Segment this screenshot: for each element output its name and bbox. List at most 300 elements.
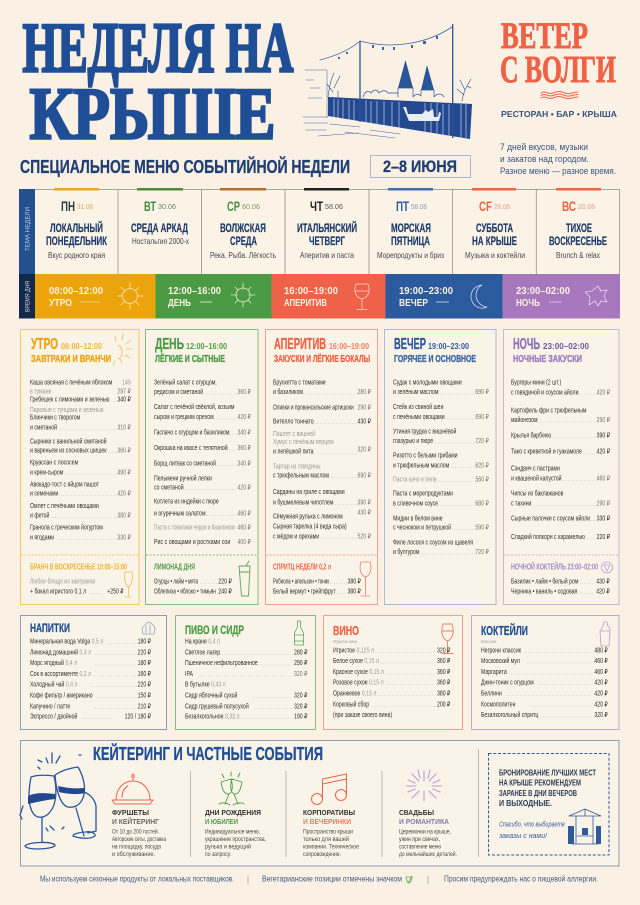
panel: wine	[324, 616, 462, 730]
day items: 420 ₽	[237, 484, 251, 492]
day: monday: 31.06	[77, 204, 93, 211]
evening items: 560 ₽	[475, 476, 489, 484]
footer note: Мы используем сезонные продукты от локальных поставщиков.	[40, 874, 234, 884]
night items: 390 ₽	[597, 432, 610, 440]
day items: Окрошка на квасе с телятиной	[154, 443, 228, 452]
service: weddings: ужин при свечах,	[399, 836, 440, 843]
day: wednesday	[210, 198, 276, 260]
cocktails list: Космополитен	[481, 701, 516, 709]
beer heading: ПИВО И СИДР	[185, 623, 244, 637]
wine list: 360 ₽	[437, 657, 450, 665]
aperitif items	[273, 379, 371, 541]
time label bar	[19, 274, 35, 318]
evening heading: ВЕЧЕР	[394, 336, 426, 353]
evening heading	[394, 336, 476, 365]
beer list: Сидр яблочный сухой	[185, 691, 238, 700]
aperitif items: и базиликом	[273, 387, 303, 396]
day: saturday: НА КРЫШЕ	[472, 234, 517, 248]
day: saturday: СF	[479, 198, 492, 214]
day: wednesday: ВОЛЖСКАЯ	[220, 221, 266, 235]
night special	[511, 562, 612, 596]
morning heading	[31, 336, 111, 365]
day special: 240 ₽	[218, 588, 232, 596]
logo	[500, 16, 617, 119]
day special: Облепиха • яблоко • тимьян	[154, 587, 216, 596]
band: morning: 08:00–12:00	[49, 285, 103, 297]
wine list: Игристое вино	[333, 638, 358, 644]
day: tuesday	[131, 198, 189, 246]
cocktails list: 460 ₽	[594, 657, 608, 665]
aperitif items: с трюфельным маслом	[273, 472, 329, 480]
booking callout: НА КРЫШЕ РЕКОМЕНДУЕМ	[499, 778, 581, 788]
panel: evening menu	[384, 330, 496, 604]
morning items: Гранола с греческим йогуртом	[30, 523, 103, 532]
evening items: 680 ₽	[475, 500, 489, 508]
aperitif items: Сёмужная рулька с лимоном	[273, 513, 343, 521]
cocktails list: Московский мул	[481, 656, 520, 665]
band: aperitif: 16:00–19:00	[284, 285, 338, 297]
band: morning	[35, 274, 156, 318]
aperitif items: 520 ₽	[358, 533, 371, 541]
aperitif items: 690 ₽	[358, 472, 371, 480]
night special: 430 ₽	[596, 578, 610, 586]
service: birthdays: рулька и ведущий	[205, 844, 251, 850]
wine list: Красное сухое 0,15 л	[333, 668, 384, 676]
day: sunday: ТИХОЕ	[566, 221, 592, 235]
day heading: ЛЁГКИЕ И СЫТНЫЕ	[155, 352, 225, 365]
day: thursday: Аперитив и паста	[300, 251, 354, 260]
beer list: 280 ₽	[294, 649, 307, 657]
evening items: и трюфельным маслом	[393, 462, 449, 470]
band: aperitif	[272, 274, 386, 318]
time bands	[19, 274, 620, 318]
night items: 420 ₽	[597, 389, 610, 397]
drinks list: 210 ₽	[138, 703, 151, 711]
aperitif items: Брускетта с томатами	[273, 379, 326, 387]
panel: day menu	[146, 330, 258, 604]
drinks list: Кофе фильтр / американо	[30, 692, 93, 700]
service: corporate: Пространство крыши	[303, 828, 353, 836]
icon: terrace umbrella	[568, 809, 601, 844]
night items: 290 ₽	[597, 416, 610, 424]
aperitif items: Сардины на гриле с овощами	[273, 488, 345, 496]
day: monday	[46, 198, 107, 260]
aperitif items: 390 ₽	[358, 499, 371, 507]
service: corporate: только для вашей	[303, 836, 349, 843]
band: evening: 19:00–23:00	[399, 285, 453, 297]
beer list: Безалкогольное 0,33 л	[185, 713, 240, 721]
night items: с говядиной и соусом айоли	[511, 388, 579, 397]
day special	[154, 561, 250, 596]
evening heading: 19:00–23:00	[428, 341, 469, 351]
cocktails heading: КОКТЕЙЛИ	[481, 623, 528, 638]
night items: 290 ₽	[597, 500, 610, 508]
beer list: 320 ₽	[294, 703, 307, 711]
drinks list: Морс ягодный 0,4 л	[30, 658, 77, 667]
service: buffet: От 10 до 200 гостей.	[112, 828, 159, 836]
band: night: 23:00–02:00	[516, 285, 570, 297]
wine list: 320 ₽	[437, 647, 450, 655]
aperitif heading	[274, 336, 370, 365]
night heading: НОЧЬ	[513, 336, 540, 353]
drinks list: 160 ₽	[138, 670, 151, 678]
aperitif items: Хумус с печёным перцем	[273, 438, 334, 446]
morning items: Гребешек с лимонами и зеленью	[30, 395, 110, 404]
aperitif special: Робиола • апельсин • тоник	[273, 577, 329, 586]
drinks list: 120 / 180 ₽	[125, 713, 151, 721]
cocktails list: Маргарита	[481, 668, 507, 676]
evening items: 690 ₽	[475, 388, 489, 396]
day heading	[155, 336, 227, 365]
day: saturday: Музыка и коктейли	[465, 251, 525, 260]
evening items: Филе лосося с соусом из щавеля	[393, 539, 473, 547]
beer list: Пшеничное нефильтрованное	[185, 659, 258, 667]
evening heading: ГОРЯЧЕЕ И ОСНОВНОЕ	[394, 354, 476, 365]
booking callout: И ВЫХОДНЫЕ.	[499, 799, 552, 808]
service: birthdays	[205, 772, 266, 858]
night items: Картофель фри с трюфельным	[511, 407, 586, 415]
week label bar	[19, 189, 35, 274]
day: thursday: ЧЕТВЕРГ	[309, 234, 345, 248]
beer list: Светлое лагер	[185, 649, 221, 657]
night heading	[513, 336, 589, 365]
aperitif special: 380 ₽	[347, 578, 361, 586]
service: buffet: И КЕЙТЕРИНГ	[112, 817, 160, 826]
night special: Черника • ваниль • содовая	[511, 588, 577, 596]
morning items: и вареньем из сосновых шишек	[30, 447, 107, 455]
drinks list: Капучино / латте	[30, 703, 71, 711]
band: morning: УТРО	[49, 297, 72, 309]
night items: Бургеры мини (2 шт.)	[511, 379, 561, 387]
morning items: и фетой	[30, 511, 50, 520]
drinks list: Сок в ассортименте 0,2 л	[30, 670, 91, 678]
wine list: Игристое 0,125 л	[333, 647, 374, 655]
beer list: 190 ₽	[294, 713, 307, 721]
band: evening	[386, 274, 502, 318]
night items	[511, 379, 610, 541]
evening items: Ризотто с белыми грибами	[393, 451, 458, 460]
drinks list: 150 ₽	[138, 692, 151, 700]
beer list: В бутылке 0,43 л	[185, 680, 226, 689]
morning special: БРАНЧ В ВОСКРЕСЕНЬЕ 10:00–15:00	[30, 562, 127, 572]
day items: со сметаной	[154, 483, 184, 492]
night items: Чипсы из баклажанов	[511, 489, 564, 498]
beer list: 290 ₽	[294, 659, 307, 667]
wine list: 200 ₽	[437, 701, 450, 709]
drinks list: 220 ₽	[138, 649, 151, 657]
day: tuesday: 30.06	[158, 204, 176, 211]
week label bar: ТЕМА НЕДЕЛИ	[26, 207, 32, 251]
day items: Рис с овощами и ростками сои	[154, 538, 231, 546]
evening items: в сливочном соусе	[393, 500, 438, 508]
evening items: 620 ₽	[475, 462, 489, 470]
band: aperitif: АПЕРИТИВ	[284, 297, 327, 309]
day: friday: МОРСКАЯ	[391, 221, 431, 235]
service: weddings: Церемонии на крыше,	[399, 828, 451, 836]
panel: week schedule	[19, 188, 620, 274]
wine list: 360 ₽	[437, 668, 450, 676]
band: night	[502, 274, 620, 318]
day items: Зелёный салат с огурцом,	[154, 378, 217, 387]
service: buffet: на площадку, посуда	[112, 844, 161, 850]
morning heading: ЗАВТРАКИ И ВРАНЧИ	[31, 354, 111, 365]
footer note: Просим предупреждать нас о пищевой аллергии.	[444, 874, 598, 884]
night items: и квашеной капустой	[511, 474, 562, 483]
aperitif special: Белый вермут • грейпфрут	[273, 587, 336, 596]
day items: сыром и грецким орехом	[154, 413, 214, 421]
morning items	[30, 378, 131, 542]
morning heading: УТРО	[31, 336, 58, 353]
morning special: + бокал игристого 0,1 л	[30, 587, 86, 596]
footer note: Вегетарианские позиции отмечены значком	[262, 874, 402, 884]
day items: 420 ₽	[237, 413, 251, 421]
morning items: 420 ₽	[117, 490, 131, 498]
icon: shaker	[600, 622, 610, 646]
band: evening: ВЕЧЕР	[399, 297, 428, 309]
day: thursday: ИТАЛЬЯНСКИЙ	[297, 220, 357, 235]
day items: 340 ₽	[237, 429, 251, 437]
wine heading: ВИНО	[333, 624, 359, 638]
morning items: 310 ₽	[117, 424, 131, 432]
illustration: rooftop terrace	[303, 24, 472, 139]
day items: 360 ₽	[237, 444, 251, 452]
morning items: 330 ₽	[117, 534, 131, 542]
morning items: и сметаной	[30, 423, 57, 432]
beer list: На кране 0,4 л	[185, 638, 220, 646]
day: wednesday: Река. Рыба. Лёгкость	[210, 251, 276, 260]
night items: с тахини	[511, 500, 532, 508]
booking callout	[488, 754, 609, 855]
day items: 460 ₽	[237, 524, 251, 532]
day: sunday: 20.06	[578, 204, 595, 211]
day special: ЛИМОНАД ДНЯ	[154, 562, 195, 572]
day items: Котлета из индейки с пюре	[154, 497, 219, 506]
panel: catering	[20, 740, 619, 866]
tagline: Разное меню — разное время.	[500, 166, 616, 176]
service: birthdays: по запросу.	[205, 851, 231, 858]
day accent bars	[54, 188, 601, 190]
day special: 220 ₽	[218, 578, 232, 586]
aperitif heading: АПЕРИТИВ	[274, 336, 326, 353]
night heading: НОЧНЫЕ ЗАКУСКИ	[513, 354, 582, 365]
aperitif items: Тартар из говядины	[273, 463, 321, 471]
morning items: Блинчики с творогом	[30, 414, 80, 422]
night heading: 23:00–02:00	[543, 341, 589, 351]
service: buffet: Авторские сеты, доставка	[112, 836, 166, 843]
day: sunday: Brunch & relax	[556, 251, 600, 260]
night items: 220 ₽	[597, 533, 610, 541]
day items: редисом и сметаной	[154, 387, 204, 396]
night special: НОЧНОЙ КОКТЕЙЛЬ 23:00–02:00	[511, 562, 598, 572]
day: wednesday: СРЕДА	[230, 234, 257, 248]
service: corporate: КОРПОРАТИВЫ	[303, 808, 355, 817]
day: thursday	[297, 198, 357, 260]
day special: Огурцы • лайм • мята	[154, 577, 198, 586]
night items: Тако с креветкой и гуакамоле	[511, 447, 582, 456]
service: corporate: компании. Техническое	[303, 844, 359, 850]
day heading: ДЕНЬ	[155, 336, 184, 353]
day: sunday: ВС	[562, 198, 576, 214]
night items: Крылья барбекю	[511, 431, 551, 440]
aperitif heading: ЗАКУСКИ И ЛЁГКИЕ БОКАЛЫ	[274, 352, 370, 365]
cocktails list: 480 ₽	[594, 647, 608, 655]
tagline: и закатов над городом.	[500, 154, 589, 164]
morning items: и семенами	[30, 490, 59, 498]
panel: aperitif menu	[266, 330, 378, 604]
beer list: Сидр грушевый полусухой	[185, 702, 249, 711]
day heading: 12:00–16:00	[186, 341, 227, 351]
day: saturday: 26.06	[494, 204, 510, 211]
tagline: 7 дней вкусов, музыки	[500, 142, 588, 152]
aperitif items: с мёдом и орехами	[273, 533, 319, 541]
service: birthdays: И ЮБИЛЕИ	[205, 817, 238, 826]
day items: Салат с печёной свёклой, козьим	[154, 402, 234, 411]
drinks list: 180 ₽	[138, 638, 151, 646]
morning items: 360 ₽	[117, 447, 131, 455]
logo: РЕСТОРАН • БАР • КРЫША	[501, 109, 617, 119]
booking callout: БРОНИРОВАНИЕ ЛУЧШИХ МЕСТ	[499, 768, 596, 778]
evening items: 720 ₽	[475, 437, 489, 445]
day: monday: Вкус родного края	[48, 251, 105, 260]
booking callout: заказы с нами!	[498, 831, 548, 840]
day: sunday: ВОСКРЕСЕНЬЕ	[549, 234, 607, 248]
drinks list: Лимонад домашний 0,4 л	[30, 648, 91, 657]
drinks heading: НАПИТКИ	[30, 621, 70, 635]
aperitif items: Вителло тоннато	[273, 418, 314, 426]
day items: Пельмени ручной лепки	[154, 474, 212, 483]
morning special	[30, 562, 132, 597]
day items: Борщ литвак со сметаной	[154, 459, 216, 468]
service: weddings: составление меню	[399, 844, 441, 850]
aperitif items: 320 ₽	[358, 446, 371, 454]
day: tuesday: СРЕДА АРКАД	[131, 221, 188, 235]
morning items: 380 ₽	[117, 512, 131, 520]
night items: Сэндвич с пастрами	[511, 465, 560, 473]
wine list: 360 ₽	[437, 679, 450, 687]
service: buffet: и обслуживание.	[112, 851, 155, 858]
cocktails list: Безалкогольный спритц	[481, 710, 539, 719]
night items: Сладкий попкорн с карамелью	[511, 532, 585, 541]
service: buffet	[112, 774, 166, 858]
day: thursday: ЧТ	[310, 198, 323, 214]
day: saturday: СУББОТА	[476, 221, 513, 235]
panel: cocktails	[472, 616, 619, 730]
evening items: Мидии в белом вине	[393, 514, 443, 523]
band: day	[156, 274, 272, 318]
morning items: 340 ₽	[117, 396, 131, 404]
night items: 330 ₽	[597, 515, 610, 523]
night special: 420 ₽	[596, 588, 610, 596]
night items: майонезом	[511, 415, 538, 424]
beer list: 320 ₽	[294, 692, 307, 700]
catering heading: КЕЙТЕРИНГ И ЧАСТНЫЕ СОБЫТИЯ	[93, 743, 323, 764]
day items: 340 ₽	[237, 460, 251, 468]
wine list: 380 ₽	[437, 690, 450, 698]
aperitif items: 430 ₽	[358, 509, 371, 517]
night special: Базилик • лайм • белый ром	[511, 577, 578, 586]
evening items: Паста качо е пепе	[393, 476, 437, 484]
day: thursday: 58.06	[325, 204, 343, 211]
wine list: Розовое сухое 0,15 л	[333, 679, 384, 687]
cocktails list: Негрони классик	[481, 647, 521, 655]
drinks list: 220 ₽	[138, 681, 151, 689]
icon: wine glass	[442, 624, 453, 654]
day: tuesday: Ностальгия 2000-х	[132, 237, 189, 246]
cocktails list: Джин-тоник с огурцом	[481, 679, 534, 687]
day: saturday	[465, 198, 525, 260]
service: weddings: И РОМАНТИКА	[399, 817, 450, 826]
morning special: +250 ₽	[107, 588, 124, 596]
band: day: ДЕНЬ	[168, 297, 191, 309]
day: friday: ПЯТНИЦА	[391, 234, 430, 248]
wine list: Белое сухое 0,15 л	[333, 657, 379, 665]
panel: morning menu	[20, 330, 139, 604]
evening items	[393, 379, 489, 556]
evening items: Судак с молодыми овощами	[393, 379, 462, 387]
cocktails list: 420 ₽	[594, 690, 608, 698]
subtitle: СПЕЦИАЛЬНОЕ МЕНЮ СОБЫТИЙНОЙ НЕДЕЛИ	[20, 156, 350, 177]
booking callout: ЗАРАНЕЕ В ДНИ ВЕЧЕРОВ	[499, 789, 577, 798]
aperitif items: и бушмелевым чипотлем	[273, 498, 333, 507]
day: sunday	[549, 198, 607, 260]
morning items: Авокадо-тост с яйцом пашот	[30, 480, 99, 489]
service: birthdays: украшение пространства,	[205, 836, 266, 843]
panel: night menu	[504, 330, 619, 604]
aperitif heading: 16:00–19:00	[329, 341, 369, 351]
day items: 400 ₽	[237, 538, 251, 546]
aperitif items: 290 ₽	[358, 404, 371, 412]
morning items: 490 ₽	[117, 469, 131, 477]
panel: beer and cider	[176, 616, 316, 730]
band: night: НОЧЬ	[516, 297, 540, 309]
evening items: 590 ₽	[475, 524, 489, 532]
day items: и огуречным салатом	[154, 510, 206, 518]
wine list	[333, 638, 450, 719]
morning items: и ягодами	[30, 534, 54, 542]
day: monday: ЛОКАЛЬНЫЙ	[50, 220, 103, 235]
title: КРЫШЕ	[30, 74, 276, 156]
cocktails list: 320 ₽	[594, 711, 608, 719]
day items: Паста с томатами черри и базиликом	[154, 523, 235, 532]
evening items: 720 ₽	[475, 548, 489, 556]
date badge: 2–8 ИЮНЯ	[383, 157, 457, 176]
panel: drinks	[20, 616, 166, 730]
day: monday: ПН	[61, 198, 75, 214]
title: НЕДЕЛЯ НА	[22, 10, 294, 88]
aperitif special: СПРИТЦ НЕДЕЛИ 0,2 л	[273, 562, 331, 572]
aperitif items: и лепёшкой пита	[273, 447, 314, 456]
night items: 460 ₽	[597, 475, 610, 483]
aperitif special: 380 ₽	[347, 588, 361, 596]
morning items: в тумане	[30, 388, 52, 396]
evening items: и булгуром	[393, 547, 419, 556]
cocktails list	[481, 638, 608, 719]
day: friday	[377, 198, 444, 260]
beer list	[185, 638, 307, 721]
day: monday: ПОНЕДЕЛЬНИК	[46, 234, 107, 248]
logo: ВЕТЕР	[501, 16, 588, 57]
icon: sun	[113, 334, 132, 365]
day items: 460 ₽	[237, 510, 251, 518]
day: wednesday: СР	[227, 198, 240, 214]
aperitif special	[273, 562, 371, 596]
day items: 360 ₽	[237, 388, 251, 396]
day: wednesday: 60.06	[242, 204, 260, 211]
aperitif items: Паштет с вишней	[273, 429, 315, 438]
morning items: 149	[122, 379, 131, 387]
morning heading: 08:00–12:00	[61, 341, 102, 351]
cocktails list: 460 ₽	[594, 668, 608, 676]
